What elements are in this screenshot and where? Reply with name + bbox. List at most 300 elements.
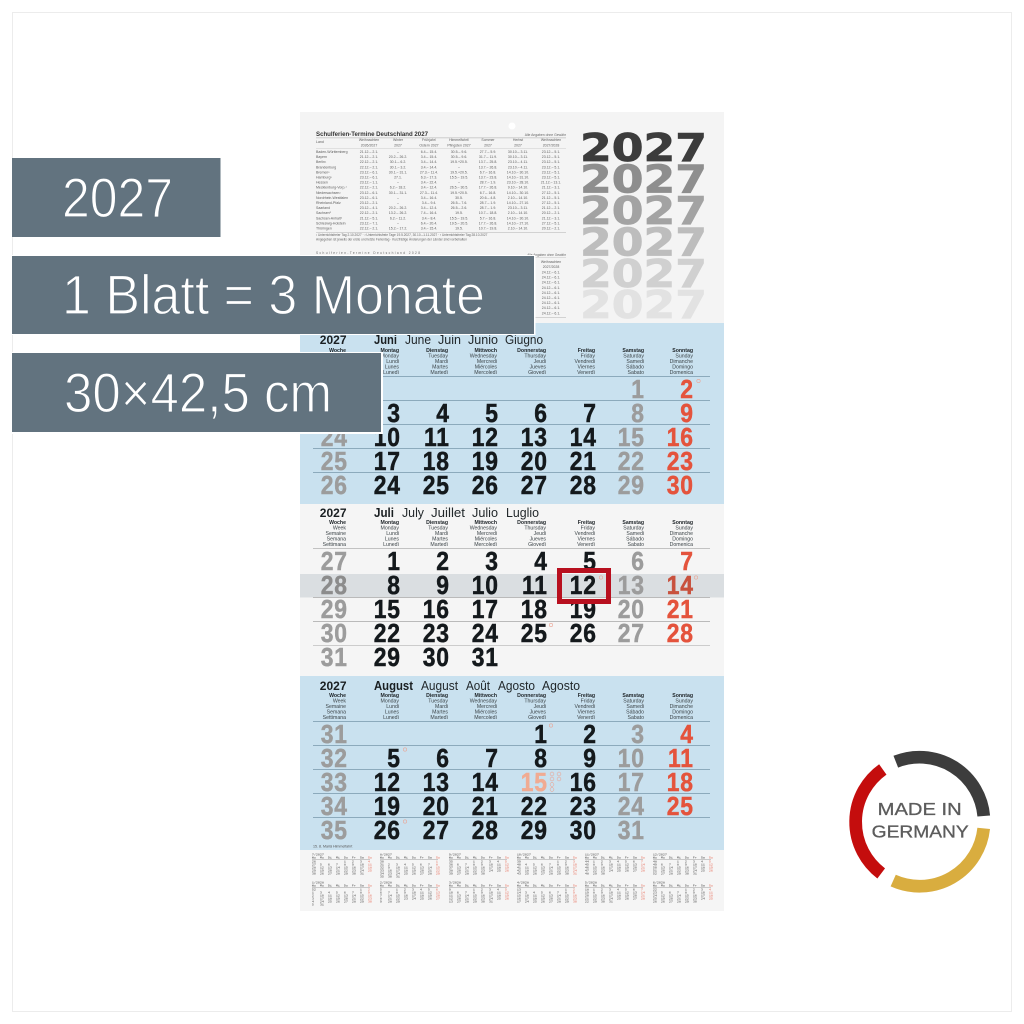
text: June weekday labels: Semana [327,364,346,370]
text: August weekday labels: Wednesday [470,698,497,704]
chart: August Sundays: 4 [680,721,694,749]
chart: mini calendar February 2028: 9 28 29 [380,900,400,904]
chart: mini calendar July 2027: 29 19 20 21 22 23 24 25 [312,870,372,872]
chart: mini calendar August 2027: 30 1 [380,860,438,864]
text: July weekday labels: Dimanche [670,531,693,537]
heading: July [320,506,539,520]
chart: August dates: 7 [485,745,499,773]
text: July weekday labels [323,520,693,548]
table: school holiday dates: 19.5.– 20.5. [450,221,468,225]
chart: August dates: 14 [472,769,499,797]
chart: July dates: 29 [374,644,401,672]
text: June weekday labels: Vendredi [575,359,595,365]
text: August weekday labels: Jeudi [534,704,546,710]
text: July weekday labels: Semana [327,536,346,542]
chart: mini calendar June 2028: 6/2028 [653,880,665,884]
chart: mini calendar June 2028: 24 12 13 14 15 16 17 18 [653,894,713,898]
chart: mini calendar December 2027: 52 27 28 29 30 31 [653,872,697,876]
chart: July week numbers: 30 [321,620,348,648]
table: school holiday dates: Pfingsten 2027 [447,144,471,148]
chart: July dates: 2 [436,548,450,576]
chart: July week numbers: 27 [321,548,348,576]
text: August weekday labels: Monday [381,698,399,704]
text: August weekday labels: Mittwoch [475,693,497,699]
table: school holiday dates: – [397,221,399,225]
chart: July Sundays: 28 [667,620,694,648]
table: school holiday dates: 22.12.– 2.1. [360,211,378,215]
chart: June dates: 17 [374,448,401,476]
table: school holiday dates: 22.12.– 2.1. [360,165,378,169]
chart: mini calendar June 2028: 22 1 2 3 4 [653,888,711,892]
chart: mini calendar June 2028: 25 19 20 21 22 23 24 25 [653,898,713,900]
text: July weekday labels: Mercoledì [474,542,498,548]
text: July weekday labels: Samedi [626,531,644,537]
table: school holiday dates: 21.12.– 13.1. [541,181,561,185]
table: school holiday dates: 22.12.– 2.1. [360,186,378,190]
chart: mini calendar November 2027: 11/2027 [585,852,599,856]
chart: July dates: 25 [521,620,548,648]
chart: mini calendar January 2028: 4 24 25 26 27 28 29 30 [312,900,372,904]
text: August weekday labels: Martes [432,710,448,716]
table: school holiday dates: 23.12.– 6.1. [360,196,378,200]
table: school holiday dates: 23.12.– 4.1. [360,206,378,210]
chart: June dates: 11 [424,424,450,452]
heading: August: Agosto [542,679,580,693]
chart: June Sundays: 2 [680,376,694,404]
text: July weekday labels: Lundi [386,531,399,537]
text: August weekday labels: Sunday [675,698,693,704]
chart: mini calendar August 2027: 33 16 17 18 19 20 21 22 [380,870,440,872]
chart: mini calendar March 2028: 12 20 21 22 23 24 25 26 [449,898,509,900]
table: school holiday dates: 21.12.– 3.1. [542,216,560,220]
chart: mini calendar November 2027: Wo Mo Di Mi Do Fr Sa So [585,856,645,860]
table: school holiday dates: Schleswig-Holstein [316,221,346,225]
table: school holiday dates: 21.12.– 2.1. [542,206,560,210]
chart: July dates: 10 [472,572,499,600]
text: August weekday labels: Donnerstag [517,693,546,699]
chart: June dates: 12 [472,424,499,452]
table: school holiday dates: 26.5.– 30.5. [450,186,468,190]
text: July weekday labels: Sunday [675,526,693,532]
chart: mini calendar September 2027: 39 27 28 29 30 [449,872,485,876]
chart: July week numbers: 29 [321,596,348,624]
chart: mini calendar September 2027: 35 1 2 3 4 5 [449,860,507,864]
table: school holiday dates: 6.4.– 15.4. [421,150,437,154]
graphic: stacked year 2027: 2027 [580,252,707,297]
chart: July dates: 30 [423,644,450,672]
heading: August: 2027 [320,679,347,693]
chart: June week numbers: 23 [321,400,348,428]
text: June weekday labels: Samstag [622,348,644,354]
text: August weekday labels: Friday [581,698,595,704]
chart: July Saturdays: 20 [618,596,645,624]
heading: June: June [405,333,431,347]
chart: June dates: 19 [472,448,499,476]
chart: mini calendar February 2028: 6 7 8 9 10 11 12 13 [380,892,440,894]
table: school holiday dates: Weihnachten [359,138,379,142]
table: school holiday dates: 15.2.– 17.2. [389,226,407,230]
table: school holiday dates: 30.1.– 3.2. [390,165,406,169]
chart: June Saturdays: 29 [618,472,645,500]
chart: July dates: 8 [387,572,401,600]
chart: July dates: 11 [522,572,548,600]
heading: June: Junio [468,333,498,347]
heading: June: Giugno [505,333,543,347]
chart: June Sundays: 23 [667,448,694,476]
table: school holiday dates: 30.10.– 3.11. [508,150,528,154]
chart: mini calendar October 2027: 39 1 2 3 [517,860,575,864]
text: August weekday labels: Thursday [524,698,546,704]
text: June weekday labels: Lundi [386,359,399,365]
chart: July dates: 9 [436,572,450,600]
panel: wall calendar [300,112,724,911]
chart: July dates: 23 [423,620,450,648]
chart: mini calendar February 2028: 5 1 2 3 4 5 6 [380,888,438,892]
text: August weekday labels: Settimana [323,715,346,721]
table: school holiday dates: 17.7.– 26.8. [479,186,497,190]
chart: August Saturdays: 3 [631,721,645,749]
chart: June Saturdays: 8 [631,400,645,428]
text: August weekday labels: Vendredi [575,704,595,710]
chart: mini calendar January 2028: 1/2028 [312,880,324,884]
table: school holiday dates: 30.10.– 3.11. [508,155,528,159]
heading: July: 2027 [320,506,347,520]
chart: mini calendar December 2027: Wo Mo Di Mi Do Fr Sa So [653,856,713,860]
text: August weekday labels: Domenica [670,715,693,721]
table: school holiday dates: Rheinland-Pfalz [316,201,341,205]
chart: August week numbers: 35 [321,817,348,845]
chart: mini calendar August 2027 [380,852,440,878]
table: school holiday dates: 3.4.– 22.4. [421,181,437,185]
chart: mini calendar August 2027: 35 30 31 [380,876,400,878]
table: school holiday dates: 6.4.– 20.4. [421,221,437,225]
table: school holiday dates: 2.10.– 14.10. [508,226,528,230]
chart: August dates: 13 [423,769,450,797]
text: July weekday labels: Viernes [578,536,595,542]
text: June weekday labels: Mercoledì [474,370,498,376]
text: July weekday labels: Jeudi [534,531,546,537]
chart: mini calendar May 2028 [585,880,645,904]
text: July weekday labels: Giovedì [528,542,547,548]
text: August weekday labels: Miércoles [475,710,497,716]
chart: mini calendar March 2028 [449,880,509,904]
text: August weekday labels: Woche [329,693,346,699]
text: July weekday labels: Lunes [385,536,399,542]
chart: mini calendar March 2028: 13 27 28 29 30 31 [449,900,493,904]
text: June weekday labels: Sonntag [672,348,693,354]
chart: mini calendar May 2028: 21 22 23 24 25 26 27 28 [585,898,645,900]
table: school holiday dates: 31.7.– 11.9. [479,155,497,159]
chart: June week numbers: 24 [321,424,348,452]
text: August weekday labels: Mardi [435,704,448,710]
table: school holiday dates: 22.12.– 2.1. [360,160,378,164]
text: July weekday labels: Tuesday [428,526,448,532]
table: school holiday dates: Nordrhein-Westfalen [316,196,348,200]
text: June weekday labels [323,348,693,376]
chart: June dates: 10 [374,424,401,452]
chart: mini calendar May 2028: 19 8 9 10 11 12 13 14 [585,892,645,894]
table: school holiday dates: 23.10.– 4.11. [508,160,528,164]
chart: July dates: 4 [534,548,548,576]
text: August weekday labels: Lunedì [383,715,400,721]
chart: August dates: 26 [374,817,401,845]
highlight: red date slider frame [560,570,608,602]
text: June weekday labels: Miércoles [475,364,497,370]
text: July weekday labels: Sabato [628,542,644,548]
table: school holiday dates: – [458,181,460,185]
chart: June dates: 25 [423,472,450,500]
graphic: stacked year 2027 [580,126,707,328]
chart: mini calendar October 2027: 43 25 26 27 28 29 30 31 [517,872,577,876]
text: June weekday labels: Dienstag [426,348,448,354]
table: school holiday dates: 2.10.– 14.10. [508,211,528,215]
table: school holiday dates: Niedersachsen² [316,191,341,195]
chart: mini calendar October 2027 [517,852,577,876]
table: school holiday dates: 7.4.– 16.4. [421,211,437,215]
chart: August dates: 1 [534,721,548,749]
chart: August dates: 30 [570,817,597,845]
text: August weekday labels: Samedi [626,704,644,710]
text: July weekday labels: Domingo [672,536,693,542]
text: July weekday labels: Miércoles [475,536,497,542]
chart: June dates: 26 [472,472,499,500]
chart: August dates: 2 [583,721,597,749]
table: school holiday dates: 15.5.– 19.5. [450,216,468,220]
chart: June week numbers: 25 [321,448,348,476]
text: August weekday labels: Lunes [385,710,399,716]
table: school holiday dates: 22.12.– 2.1. [360,226,378,230]
text: June weekday labels: Wednesday [470,354,497,360]
text: August weekday labels: Sábado [626,710,644,716]
text: June weekday labels: Mittwoch [475,348,497,354]
text: June weekday labels: Tuesday [428,354,448,360]
text: June weekday labels: Sunday [675,354,693,360]
heading: July: Juillet [431,506,466,520]
chart: mini calendar October 2027: 40 4 5 6 7 8 9 10 [517,864,577,866]
text: July weekday labels: Thursday [524,526,546,532]
table: school holiday dates: 2027 [514,144,522,148]
text: June weekday labels: Mardi [435,359,448,365]
text: June weekday labels: Martedì [430,370,449,376]
panel: mini calendars [300,850,724,911]
heading: June: Juin [438,333,461,347]
table: school holiday dates: 3.4.– 15.4. [421,155,437,159]
chart: June Sundays: 16 [667,424,694,452]
chart: mini calendar November 2027: 45 8 9 10 11 12 13 14 [585,864,645,866]
chart: July dates: 5 [583,548,597,576]
table: school holiday dates: 14.10.– 30.10. [507,191,529,195]
text: July weekday labels: Martes [432,536,448,542]
table: school holiday dates: 6.7.– 16.8. [480,191,496,195]
text: August weekday labels: Dienstag [426,693,448,699]
chart: August dates: 29 [521,817,548,845]
text: second holiday table fragment: Schulferien-Termine Deutschland 2028 [316,251,420,255]
chart: mini calendar June 2028: 23 5 6 7 8 9 10 11 [653,892,713,894]
text: second holiday table fragment: 24.12.– 6.1. [542,301,560,305]
table: school holiday dates: 30.1.– 31.1. [389,170,407,174]
chart: August week numbers: 31 [321,721,348,749]
heading: school holidays title: Schulferien-Termine Deutschland 2027 [316,131,429,138]
table: school holiday dates: 30.5. [455,196,463,200]
table: school holiday dates: Herbst [513,138,523,142]
table: school holiday dates: 10.7.– 18.8. [479,211,497,215]
chart: mini calendar June 2028: 26 26 27 28 29 30 [653,900,697,904]
chart: July Saturdays [618,548,645,648]
chart: August week numbers: 32 [321,745,348,773]
text: July weekday labels: Friday [581,526,595,532]
chart: mini calendar September 2027: 38 20 21 22 23 24 25 26 [449,870,509,872]
table: school holiday dates: 27.12.– 5.1. [542,201,560,205]
table: school holiday dates: Bayern [316,155,327,159]
table: school holiday dates: 28.7.– 1.9. [480,201,496,205]
chart: August dates: 8 [534,745,548,773]
text: second holiday table fragment: Alle Angaben ohne Gewähr [527,253,567,257]
chart: June dates: 7 [583,400,597,428]
icon: July holiday markers [549,576,698,627]
text: July weekday labels: Montag [381,520,399,526]
table: school holiday dates: – [397,150,399,154]
table: school holiday dates: Thüringen [316,226,332,230]
table: school holiday dates: Mecklenburg-Vorp.⁴ [316,186,347,190]
chart: June week numbers [321,376,348,500]
chart: mini calendar September 2027: 9/2027 [449,852,461,856]
chart: mini calendar April 2028: 14 3 4 5 6 7 8 9 [517,892,575,894]
chart: mini calendar August 2027: 8/2027 [380,852,392,856]
table: school holiday dates: 15.5.– 19.5. [450,176,468,180]
text: July weekday labels: Week [333,526,346,532]
chart: June dates: 4 [436,400,450,428]
text: August weekday labels: Sonntag [672,693,693,699]
table: school holiday dates [316,138,561,230]
chart: mini calendar July 2027: 26 1 2 3 4 [312,860,370,864]
chart: August week numbers [321,721,348,845]
table: school holiday dates: Frühjahr/ [422,138,436,142]
text: second holiday table fragment: 24.12.– 6.1. [542,306,560,310]
text: June weekday labels: Domingo [672,364,693,370]
banner: size [12,352,383,434]
chart: June dates: 13 [521,424,548,452]
text: June weekday labels: Viernes [578,364,595,370]
badge: made in Germany: GERMANY [872,822,969,842]
chart: mini calendar February 2028: 2/2028 [380,880,392,884]
table: school holiday dates: 14.10.– 27.10. [507,221,529,225]
table: school holiday dates: 3.4.– 8.4. [422,216,436,220]
chart: August dates: 5 [387,745,401,773]
text: August footnote: 15. 8. Mariä Himmelfahrt [313,844,352,848]
chart: mini calendar March 2028: 11 13 14 15 16 17 18 19 [449,894,509,898]
table: school holiday dates: 6.2.– 18.2. [390,186,406,190]
banner: size: 30×42,5 cm [64,361,332,424]
table: school holiday dates: 23.12.– 2.1. [360,201,378,205]
table: school holiday dates: 27.3.– 11.4. [420,191,438,195]
text: second holiday table fragment: 24.12.– 6.1. [542,311,560,315]
chart: June Sundays: 9 [680,400,694,428]
table: school holiday dates: 28.7.– 1.9. [480,181,496,185]
chart: July dates: 24 [472,620,499,648]
chart: August Sundays [667,721,694,821]
table: school holiday dates: 19.5. [455,211,463,215]
text: July weekday labels: Mittwoch [475,520,497,526]
chart: mini calendar April 2028: 16 17 18 19 20 21 22 23 [517,898,577,900]
table: school holiday dates: Bremen² [316,170,330,174]
chart: mini calendar December 2027: 51 20 21 22 23 24 25 26 [653,870,713,872]
chart: August dates: 20 [423,793,450,821]
table: school holiday dates: 20.2.– 26.2. [389,206,407,210]
chart: mini calendar December 2027 [653,852,713,876]
text: June weekday labels: Giovedì [528,370,547,376]
chart: July dates: 22 [374,620,401,648]
table: school holiday dates: 6.3.– 17.3. [421,176,437,180]
table: school holiday dates: Brandenburg [316,165,336,169]
table: school holiday dates: 2027 [484,144,492,148]
chart: mini calendar April 2028: 15 10 11 12 13 14 15 16 [517,894,577,898]
text: June weekday labels: Thursday [524,354,546,360]
table: school holiday dates: 3.4.– 9.4. [422,201,436,205]
chart: mini calendar January 2028: 2 10 11 12 13 14 15 16 [312,894,372,898]
chart: August 15 public holiday: 15 [521,769,548,797]
chart: mini calendar December 2027: 12/2027 [653,852,667,856]
text: July weekday labels: Donnerstag [517,520,546,526]
chart: mini calendar January 2028: Wo Mo Di Mi Do Fr Sa So [312,884,372,888]
text: June weekday labels: Lunedì [383,370,400,376]
chart: mini calendar April 2028: 17 24 25 26 27 28 29 30 [517,900,577,904]
table: school holiday dates: 26.5.– 7.6. [451,201,467,205]
text: August weekday labels: Week [333,698,346,704]
table: school holiday dates: 2027 [394,144,402,148]
chart: August dates: 6 [436,745,450,773]
chart: July week numbers: 31 [321,644,348,672]
table: school holiday dates: Baden-Württemberg [316,150,348,154]
heading: August: August [421,679,458,693]
table: school holiday dates: 23.10.– 4.11. [508,165,528,169]
chart: mini calendar July 2027 [312,852,372,876]
table: school holiday dates: 30.5.– 9.6. [451,155,467,159]
table: school holiday dates: 21.12.– 2.1. [360,150,378,154]
chart: July Saturdays: 6 [631,548,645,576]
chart: mini calendar April 2028 [517,880,577,904]
table: school holiday dates: 6.2.– 11.2. [390,216,406,220]
chart: August dates: 23 [570,793,597,821]
chart: mini calendar September 2027: 36 6 7 8 9 10 11 12 [449,864,509,866]
chart: August week numbers: 34 [321,793,348,821]
table: school holiday dates: 30.1.– 31.1. [389,191,407,195]
chart: August Saturdays: 24 [618,793,645,821]
heading: July: Luglio [506,506,539,520]
chart: mini calendar September 2027: 37 13 14 15 16 17 18 19 [449,866,509,870]
chart: mini calendar May 2028: 22 29 30 31 [585,900,613,904]
chart: July Sundays: 14 [667,572,694,600]
chart: mini calendar May 2028: 5/2028 [585,880,597,884]
text: July weekday labels: Saturday [623,526,644,532]
chart: June Sundays: 30 [667,472,694,500]
table: school holiday dates: 23.10.– 28.10. [507,181,529,185]
table: school holiday dates: 23.12.– 6.1. [360,176,378,180]
chart: July Saturdays: 27 [618,620,645,648]
text: August weekday labels: Semana [327,710,346,716]
text: June weekday labels: Sabato [628,370,644,376]
chart: mini calendar April 2028: 13 1 2 [517,888,575,892]
text: August weekday labels: Martedì [430,715,449,721]
table: school holiday dates: 13.7.– 23.8. [479,176,497,180]
chart: August Sundays: 18 [667,769,694,797]
chart: July dates [374,548,597,672]
text: August weekday labels: Saturday [623,698,644,704]
table: school holiday dates: – [397,181,399,185]
heading: July: July [402,506,425,520]
chart: mini calendar June 2028: Wo Mo Di Mi Do Fr Sa So [653,884,713,888]
chart: mini calendar March 2028: Wo Mo Di Mi Do Fr Sa So [449,884,509,888]
chart: August dates: 28 [472,817,499,845]
